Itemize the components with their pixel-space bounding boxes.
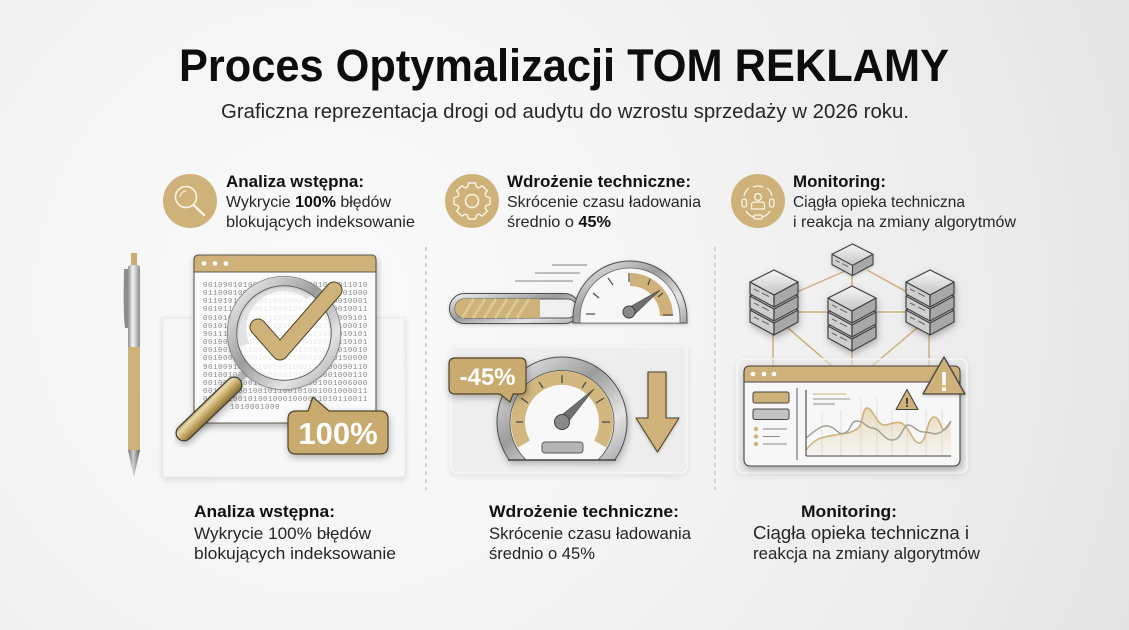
text: wdrozenie header: średnio o 45% — [507, 214, 611, 231]
text: wdrozenie header: Skrócenie czasu ładowania — [507, 194, 701, 211]
large gauge — [497, 357, 627, 460]
binary text: 001010001001001010010010110100010 — [203, 323, 368, 331]
line chart — [806, 390, 951, 456]
icon: small warning triangle: ! — [905, 395, 909, 410]
caption: analiza: Wykrycie 100% błędów — [194, 524, 372, 543]
icon: large warning triangle: ! — [939, 366, 949, 397]
caption: monitoring — [753, 502, 981, 563]
dashboard window — [744, 366, 960, 466]
icon: pen — [124, 253, 140, 477]
binary text: 901009100101000091000110100090110 — [203, 364, 368, 372]
caption: monitoring: Ciągła opieka techniczna i — [753, 523, 969, 543]
header: analiza — [163, 173, 415, 231]
binary text: 001001101100110100011001011010010 — [203, 347, 368, 355]
caption: analiza — [194, 502, 396, 563]
callout: -45% — [449, 358, 526, 402]
server stack: left — [750, 270, 798, 335]
binary text: 001100100100101100101001001000011 — [203, 388, 368, 396]
binary text: 001000101001001001100010100150000 — [203, 355, 368, 363]
illustration: monitoring — [737, 244, 967, 473]
paper sheet — [163, 318, 405, 477]
sidebar — [753, 388, 797, 460]
text: analiza header: Analiza wstępna: — [226, 173, 364, 191]
caption: wdrozenie — [489, 502, 692, 563]
title: Proces Optymalizacji TOM REKLAMY — [179, 40, 949, 91]
binary text: 001011010100170001000110110010011 — [203, 306, 368, 314]
server stack: center — [828, 286, 876, 351]
binary text: 001001001010000001010011001000110 — [203, 372, 368, 380]
speed lines — [515, 265, 587, 281]
illustration: speed — [449, 261, 687, 473]
binary text: 001090101001110100101001011011010 — [203, 282, 368, 290]
header: wdrozenie — [445, 173, 701, 231]
text: wdrozenie header: Wdrożenie techniczne: — [507, 173, 691, 191]
icon: gear circle — [445, 174, 499, 228]
text: monitoring header — [793, 173, 1016, 231]
arrow: down — [636, 372, 679, 452]
illustration: audit — [124, 253, 405, 477]
caption: wdrozenie: Skrócenie czasu ładowania — [489, 524, 692, 543]
text: wdrozenie header — [507, 173, 701, 231]
icon: magnifier circle — [163, 174, 217, 228]
text: monitoring header: i reakcja na zmiany algorytmów — [793, 214, 1016, 231]
server: top — [832, 244, 873, 276]
subtitle: Graficzna reprezentacja drogi od audytu do wzrostu sprzedaży w 2026 roku. — [221, 101, 909, 123]
text: analiza header: Wykrycie 100% błędów — [226, 194, 391, 211]
binary text: 001010101001011009010010101009101 — [203, 315, 368, 323]
icon: small warning triangle — [896, 390, 918, 410]
caption: analiza: blokujących indeksowanie — [194, 544, 396, 563]
text: analiza header — [226, 173, 415, 231]
callout: 100%: 100% — [298, 416, 378, 451]
text: monitoring header: Ciągła opieka techniczna — [793, 194, 965, 211]
caption: wdrozenie: średnio o 45% — [489, 544, 595, 563]
binary text — [203, 282, 368, 412]
glass panel — [451, 347, 687, 473]
binary text: 001000100100110010110010010110101 — [203, 339, 368, 347]
progress bar — [450, 294, 580, 324]
header: monitoring — [731, 173, 1016, 231]
server stack: right — [906, 270, 954, 335]
icon: large warning triangle — [923, 357, 965, 397]
binary text: 901110010011010110100121011010101 — [203, 331, 368, 339]
browser window with binary code — [194, 255, 376, 423]
binary text: 001001010011010110101001001006000 — [203, 380, 368, 388]
icon: support person circle — [731, 174, 785, 228]
icon: magnifier with check — [184, 276, 341, 433]
glass panel — [737, 359, 967, 473]
callout: -45%: -45% — [459, 364, 516, 391]
text: monitoring header: Monitoring: — [793, 173, 886, 191]
caption: monitoring: reakcja na zmiany algorytmów — [753, 544, 981, 563]
caption: wdrozenie: Wdrożenie techniczne: — [489, 502, 679, 521]
binary text: 001001001010010001000011010110011 — [203, 396, 368, 404]
binary text: 011010100110010050001110100010001 — [203, 298, 368, 306]
caption: monitoring: Monitoring: — [801, 502, 897, 521]
small gauge — [573, 261, 687, 323]
connection lines — [773, 268, 929, 366]
callout: 100% — [288, 397, 388, 454]
binary text: 011000100100100100011010011001000 — [203, 290, 368, 298]
text: analiza header: blokujących indeksowanie — [226, 214, 415, 231]
caption: analiza: Analiza wstępna: — [194, 502, 335, 521]
binary text: 1010001000 — [230, 404, 280, 412]
